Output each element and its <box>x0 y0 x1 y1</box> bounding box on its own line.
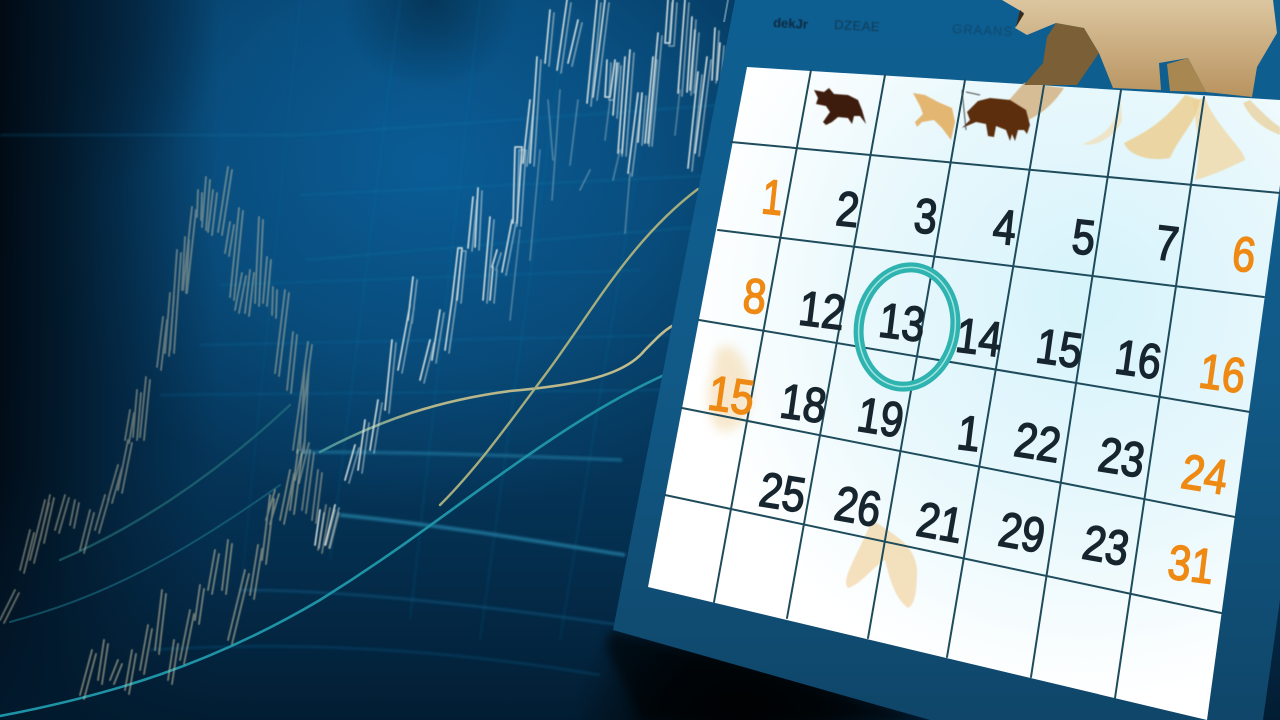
bear silhouette <box>1002 0 1277 97</box>
bear reflection on the page <box>1002 83 1280 180</box>
calendar date numbers <box>705 170 1259 595</box>
pale tan smudges on the page <box>708 346 917 608</box>
row 2 dates: 12 <box>796 280 848 341</box>
row 1 dates: 6 <box>1229 226 1259 283</box>
bear body <box>1002 0 1277 97</box>
row 2 dates: 14 <box>953 307 1005 368</box>
row 4 dates: 21 <box>913 491 967 554</box>
row 3 dates: 23 <box>1095 427 1149 488</box>
row 3 dates: 19 <box>854 387 908 448</box>
smudge behind left 15 <box>708 346 752 432</box>
row 3 dates: 15 <box>705 365 758 426</box>
teal moving average <box>0 376 662 716</box>
calendar shadow <box>605 630 930 720</box>
row 2 dates: 16 <box>1112 329 1165 390</box>
teal circle highlighting 13 <box>849 260 965 394</box>
row 2 dates: 15 <box>1033 318 1086 379</box>
row 4 dates: 25 <box>756 462 810 523</box>
row 3 dates: 1 <box>954 405 984 462</box>
boar icon: dark left <box>814 88 866 125</box>
row 2 dates: 16 <box>1196 343 1249 404</box>
row 3 dates: 24 <box>1178 444 1232 505</box>
boar icon: tan middle <box>913 93 955 140</box>
header label 2: DZEAE <box>834 17 880 34</box>
header label 1: dekJr <box>773 15 808 32</box>
month header text <box>773 15 1013 39</box>
teal moving average, faint <box>10 485 280 622</box>
bear hind leg <box>1167 58 1206 92</box>
row 4 dates <box>756 462 1217 595</box>
bear dark front leg <box>1024 23 1099 85</box>
calendar white page <box>648 67 1280 720</box>
olive moving average <box>440 189 698 505</box>
bear mouth <box>1016 10 1024 27</box>
moving average lines <box>0 189 698 716</box>
candlestick series: lower left <box>80 450 302 699</box>
row 1 dates <box>759 170 1259 283</box>
calendar grid lines <box>665 70 1280 698</box>
row 4 dates: 23 <box>1079 514 1133 577</box>
chart grid lines <box>0 0 720 675</box>
row 1 dates: 5 <box>1069 209 1098 266</box>
boar icon: brown right <box>962 90 1030 141</box>
row 1 dates: 7 <box>1152 215 1182 272</box>
smudge below 21 <box>846 520 917 608</box>
row 3 dates: 18 <box>777 373 830 434</box>
calendar edge highlight <box>724 0 728 22</box>
row 1 dates: 3 <box>911 188 940 245</box>
candlestick series: rising right <box>315 0 724 548</box>
row 2 dates: 13 <box>876 292 928 353</box>
row 4 dates: 29 <box>995 501 1049 564</box>
row 3 dates <box>705 365 1232 505</box>
header label 3: GRAANS <box>952 21 1013 39</box>
calendar board <box>605 0 1280 720</box>
candlestick series: left peak <box>0 167 339 623</box>
row 1 dates: 1 <box>759 170 786 226</box>
calendar blue backing <box>613 0 1280 720</box>
teal moving average, upper faint <box>60 405 290 560</box>
row 2 dates <box>740 268 1249 404</box>
row 4 dates: 26 <box>831 475 885 538</box>
row 4 dates: 31 <box>1165 534 1217 595</box>
row 2 dates: 8 <box>740 268 769 325</box>
row 3 dates: 22 <box>1011 412 1065 473</box>
tan moving average <box>320 326 672 452</box>
row 1 dates: 4 <box>990 199 1019 256</box>
row 1 dates: 2 <box>833 181 862 238</box>
